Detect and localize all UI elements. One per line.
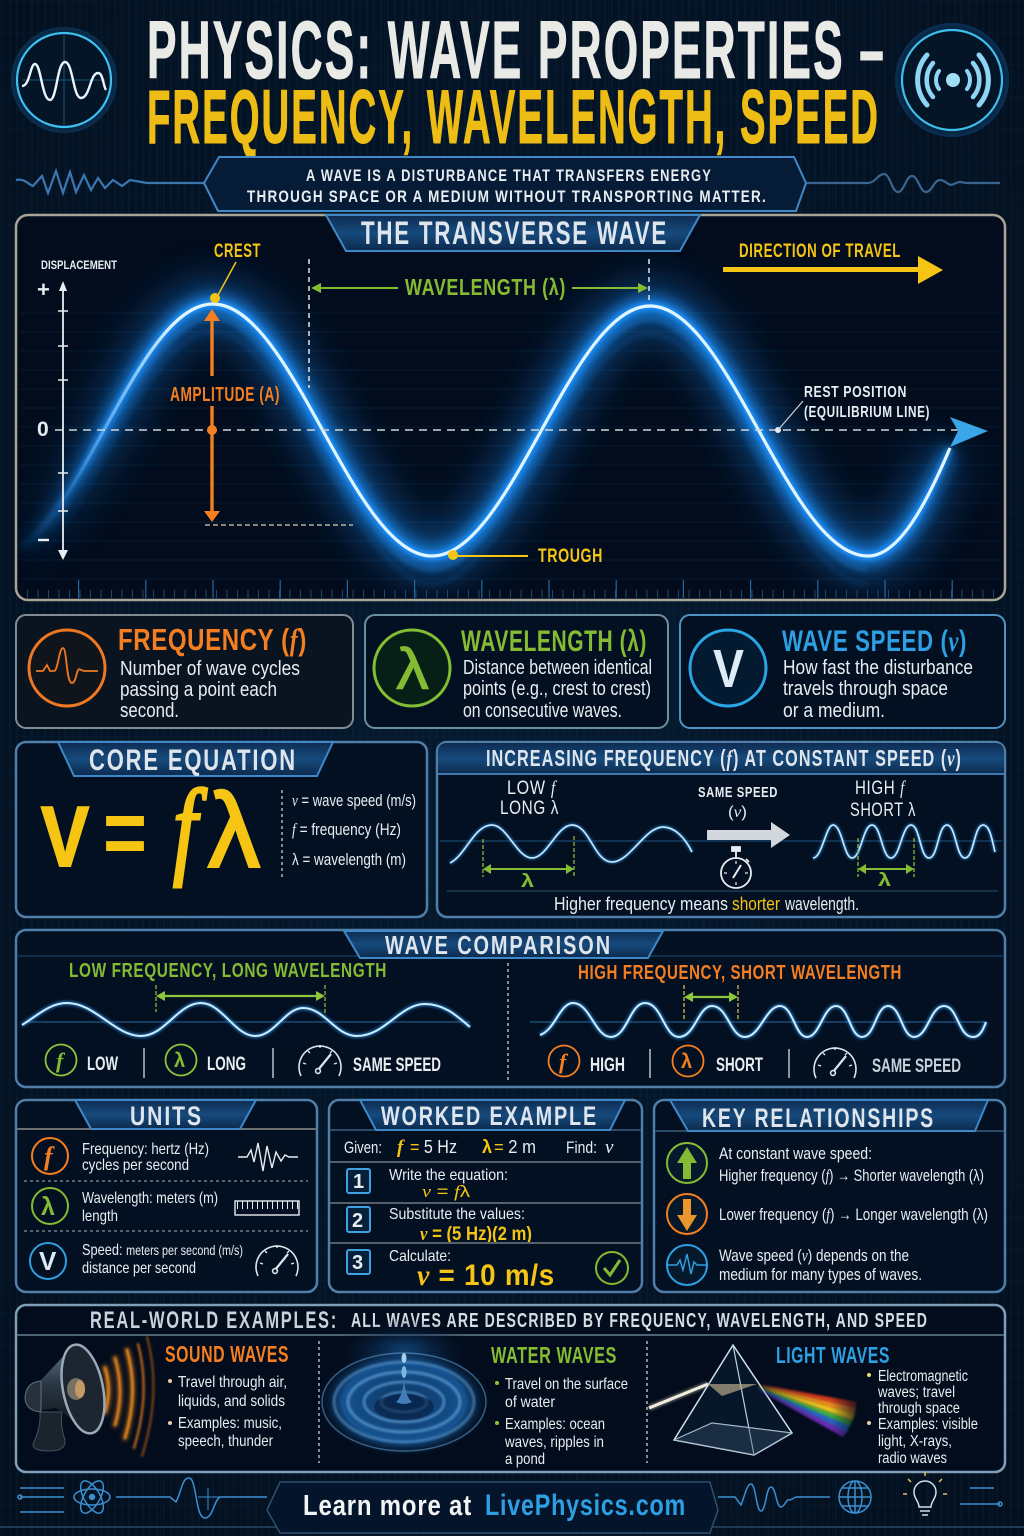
heading [90,1307,928,1334]
relation: higher frequency: Higher frequency (f) → Shorter wavelength (λ) [719,1166,984,1185]
icon: light bulb [903,1472,947,1515]
example: light waves: LIGHT WAVES [776,1342,890,1368]
icon: lambda [374,630,450,706]
equation legend [292,791,416,869]
panel: real-world examples [16,1305,1005,1472]
example: sound waves: SOUND WAVES [165,1341,289,1367]
example: water waves: of water [505,1394,556,1411]
unit: frequency [32,1138,298,1174]
icon row: high: SAME SPEED [872,1056,961,1077]
low frequency wave [450,778,692,891]
card: wave speed: or a medium. [783,700,885,722]
title [147,5,886,160]
label: wavelength [309,259,649,388]
unit: wavelength: length [82,1208,118,1225]
icon: globe [839,1481,871,1513]
icon: oscilloscope wave [11,27,117,133]
step 1 [347,1167,508,1201]
panel: the transverse wave [0,215,1005,600]
relation: wave speed depends on medium [667,1245,922,1285]
step 3: v = 10 m/s [417,1259,555,1292]
takeaway text [554,894,859,914]
given row [344,1137,614,1158]
unit: frequency: Frequency: hertz (Hz) [82,1141,209,1158]
example: water waves: a pond [505,1451,545,1468]
relation: higher frequency: At constant wave speed: [719,1144,872,1163]
low frequency wave: LONG λ [500,798,559,819]
rest position line [55,384,988,447]
low frequency wave: λ [521,871,534,891]
card: wave speed: WAVE SPEED (v) [782,625,967,658]
step 1: v = fλ [422,1182,471,1201]
card: frequency: passing a point each [120,679,277,701]
example: sound waves: liquids, and solids [178,1393,285,1410]
definition banner [16,157,1000,211]
unit: wavelength [32,1188,299,1225]
icon row: low: SAME SPEED [353,1055,441,1076]
panel: increasing frequency [437,742,1005,917]
equation: λ [208,772,260,890]
heading tab: CORE EQUATION [89,744,297,777]
low frequency side [22,960,470,1078]
unit: frequency: cycles per second [82,1157,189,1174]
same speed arrow and stopwatch [698,784,790,888]
example: light waves: radio waves [878,1450,947,1467]
footer decorative icons [0,1472,1024,1527]
example: light waves [649,1342,978,1467]
icon row: low: LOW [87,1054,118,1075]
example: sound waves: Examples: music, [178,1415,282,1432]
example: water waves: waves, ripples in [504,1434,604,1451]
given row: f [397,1137,405,1158]
high frequency wave [813,778,995,890]
given row: v [605,1137,614,1158]
icon: broadcast signal [895,23,1009,137]
icon: check [596,1252,628,1284]
definition banner: A WAVE IS A DISTURBANCE THAT TRANSFERS ENERGY [306,166,712,185]
equation legend: v = wave speed (m/s) [292,791,416,810]
label: direction of travel [723,241,943,284]
icon row: low: f [56,1048,66,1073]
high frequency wave: SHORT λ [850,800,916,821]
panel: wave comparison [16,930,1005,1087]
example: sound waves [25,1337,289,1456]
unit: speed [30,1242,298,1279]
rest position line: (EQUILIBRIUM LINE) [804,404,930,421]
high frequency wave: λ [878,870,891,890]
given row: Find: [566,1138,597,1157]
unit: speed: Speed: meters per second (m/s) [82,1242,243,1259]
panel: units [16,1100,317,1292]
unit: wavelength: λ [41,1193,55,1221]
rest position line: REST POSITION [804,384,907,401]
icon row: high: λ [681,1051,692,1073]
step 3: 3 [352,1252,363,1274]
icon row: low: LONG [207,1054,246,1075]
equation [41,769,260,890]
panel: core equation [16,742,427,917]
unit: speed: distance per second [82,1260,196,1277]
card: frequency: FREQUENCY (f) [118,622,307,657]
equation: f [173,769,207,888]
footer call to action: Learn more at [303,1490,472,1522]
icon row: low: λ [174,1050,185,1072]
card: frequency: Number of wave cycles [120,658,300,680]
step 1: 1 [353,1171,364,1193]
unit: speed: V [39,1246,57,1276]
footer call to action [267,1482,718,1533]
icon: frequency pulse [29,630,105,706]
displacement axis: DISPLACEMENT [41,258,118,272]
relation: wave speed depends on medium: Wave speed (v) depends on the [719,1246,909,1265]
example: light waves: Electromagnetic [878,1368,968,1385]
example: light waves: Examples: visible [878,1416,978,1433]
panel: key relationships [654,1100,1005,1292]
relation: wave speed depends on medium: medium for many types of waves. [719,1265,922,1284]
heading tab: WORKED EXAMPLE [381,1101,598,1131]
given row: λ [482,1137,492,1157]
heading tab: THE TRANSVERSE WAVE [361,215,668,251]
icon: atom [74,1477,110,1517]
heading: REAL-WORLD EXAMPLES: [90,1307,338,1334]
heading band: INCREASING FREQUENCY (f) AT CONSTANT SPEED (v) [486,745,962,771]
unit: frequency: f [44,1142,55,1171]
same speed arrow and stopwatch: (v) [728,804,747,821]
label: trough [448,546,603,567]
takeaway text: Higher frequency means [554,894,728,914]
relation: higher frequency [667,1143,984,1185]
label: amplitude: AMPLITUDE (A) [170,384,280,406]
heading tab: KEY RELATIONSHIPS [702,1103,935,1133]
example: water waves: Examples: ocean [505,1416,605,1433]
example: water waves: WATER WAVES [491,1342,617,1368]
step 2: 2 [352,1210,363,1232]
takeaway text: shorter [732,894,780,914]
icon: water ripples [316,1318,492,1458]
heading tab: WAVE COMPARISON [385,930,612,960]
label: amplitude [170,309,353,525]
displacement axis: 0 [37,418,49,441]
displacement axis [37,258,118,560]
unit: wavelength: Wavelength: meters (m) [82,1190,218,1207]
given row: = 5 Hz [410,1137,457,1157]
high frequency side: HIGH FREQUENCY, SHORT WAVELENGTH [578,962,902,984]
icon row: high: HIGH [590,1055,625,1076]
step 1: Write the equation: [389,1167,508,1184]
low frequency side: LOW FREQUENCY, LONG WAVELENGTH [69,960,387,982]
high frequency side [530,962,986,1078]
icon: v: V [713,639,744,699]
example: light waves: through space [878,1400,960,1417]
heading tab [75,1100,256,1131]
equation: = [103,782,147,884]
definition banner: THROUGH SPACE OR A MEDIUM WITHOUT TRANSPORTING MATTER. [247,187,767,206]
displacement axis: + [37,277,50,302]
card: frequency [16,615,353,728]
label: trough: TROUGH [538,546,603,567]
example: light waves: waves; travel [877,1384,955,1401]
step 3: Calculate: [389,1248,451,1265]
chart: glowing wave [0,304,1000,595]
label: crest [210,241,261,303]
step 2: Substitute the values: [389,1206,525,1223]
takeaway text: wavelength. [784,894,859,914]
high frequency wave: HIGH f [855,778,907,799]
example: sound waves: Travel through air, [178,1374,287,1391]
heading tab: UNITS [130,1101,203,1131]
card: wave speed: travels through space [783,678,948,700]
card: wave speed: How fast the disturbance [783,657,973,679]
step 2 [347,1206,532,1245]
label: wavelength: WAVELENGTH (λ) [405,274,566,300]
icon: prism and spectrum [649,1345,857,1455]
panel: worked example [329,1100,642,1292]
example: light waves: light, X-rays, [878,1433,952,1450]
icon: megaphone [25,1337,153,1456]
icon row: high [548,1046,961,1078]
card: wave speed [680,615,1005,728]
card: wavelength: Distance between identical [463,657,652,679]
card: wavelength: on consecutive waves. [463,700,622,722]
icon: v [690,630,766,706]
icon row: low [46,1044,441,1078]
label: crest: CREST [214,241,261,262]
given row: Given: [344,1138,382,1157]
relation: lower frequency: Lower frequency (f) → Longer wavelength (λ) [719,1205,988,1224]
example: water waves: Travel on the surface [505,1376,628,1393]
icon: lambda: λ [396,637,429,702]
label: direction of travel: DIRECTION OF TRAVEL [739,241,901,262]
step 2: v = (5 Hz)(2 m) [420,1224,532,1245]
relation: lower frequency [667,1194,988,1234]
example: sound waves: speech, thunder [178,1433,274,1450]
card: wavelength [365,615,668,728]
footer call to action: LivePhysics.com [485,1489,686,1522]
icon row: high: SHORT [716,1055,763,1076]
equation legend: λ = wavelength (m) [292,850,406,869]
equation: V [41,790,89,885]
same speed arrow and stopwatch: SAME SPEED [698,784,778,801]
card: wavelength: points (e.g., crest to crest) [463,678,651,700]
card: frequency: second. [120,700,179,722]
low frequency wave: LOW f [507,778,558,799]
step 3 [347,1248,628,1292]
icon row: high: f [559,1049,569,1074]
example: water waves [316,1318,628,1468]
given row: = 2 m [494,1137,536,1157]
equation legend: f = frequency (Hz) [292,820,401,839]
card: wavelength: WAVELENGTH (λ) [461,625,647,658]
